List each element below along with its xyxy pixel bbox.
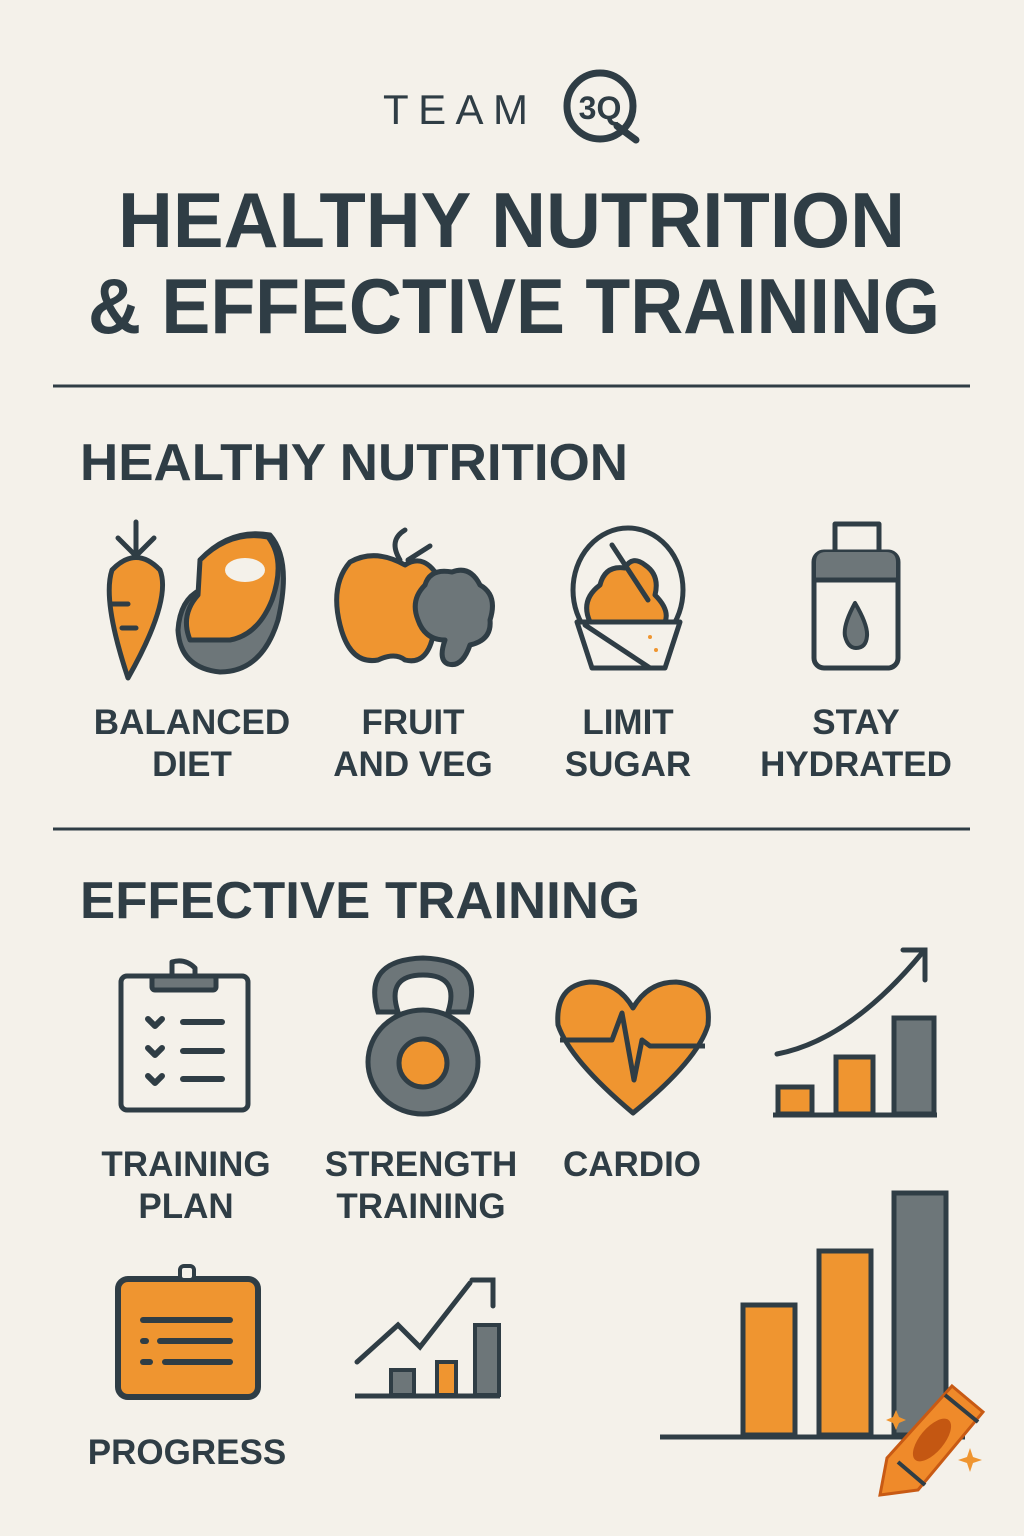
labels: training: TRAINING [336, 1187, 506, 1226]
icon: growth chart [773, 950, 937, 1115]
icon: kettlebell [368, 958, 478, 1114]
logo: team 3Q: TEAM [383, 86, 538, 133]
labels: nutrition: SUGAR [565, 745, 691, 784]
icon: water bottle [814, 524, 898, 668]
icon: clipboard checklist [121, 961, 248, 1110]
labels: training [101, 1145, 701, 1226]
icon: heart cardio [558, 982, 708, 1113]
heading: effective training: EFFECTIVE TRAINING [80, 872, 640, 930]
title [88, 176, 940, 350]
labels: nutrition: BALANCED [94, 703, 290, 742]
heading: healthy nutrition: HEALTHY NUTRITION [80, 434, 628, 492]
labels: training: STRENGTH [325, 1145, 517, 1184]
icon: small chart [355, 1280, 500, 1396]
icon: fruit and veg [337, 530, 492, 665]
label: progress: PROGRESS [88, 1433, 286, 1472]
icon: progress clipboard [118, 1266, 258, 1397]
title: & EFFECTIVE TRAINING [88, 262, 940, 350]
labels: nutrition: FRUIT [361, 703, 465, 742]
logo: team 3Q: 3Q [579, 90, 621, 126]
labels: nutrition: HYDRATED [760, 745, 952, 784]
logo: team 3Q [383, 73, 636, 140]
labels: training: PLAN [138, 1187, 234, 1226]
labels: training: TRAINING [101, 1145, 271, 1184]
icon: limit sugar [573, 528, 683, 668]
labels: nutrition [94, 703, 952, 784]
labels: training: CARDIO [563, 1145, 701, 1184]
labels: nutrition: AND VEG [333, 745, 493, 784]
labels: nutrition: STAY [812, 703, 900, 742]
chart: big bars [660, 1193, 965, 1437]
labels: nutrition: LIMIT [582, 703, 674, 742]
labels: nutrition: DIET [152, 745, 232, 784]
icon: crayon [880, 1386, 983, 1495]
icon: carrot and steak [109, 522, 283, 678]
title: HEALTHY NUTRITION [118, 176, 905, 264]
